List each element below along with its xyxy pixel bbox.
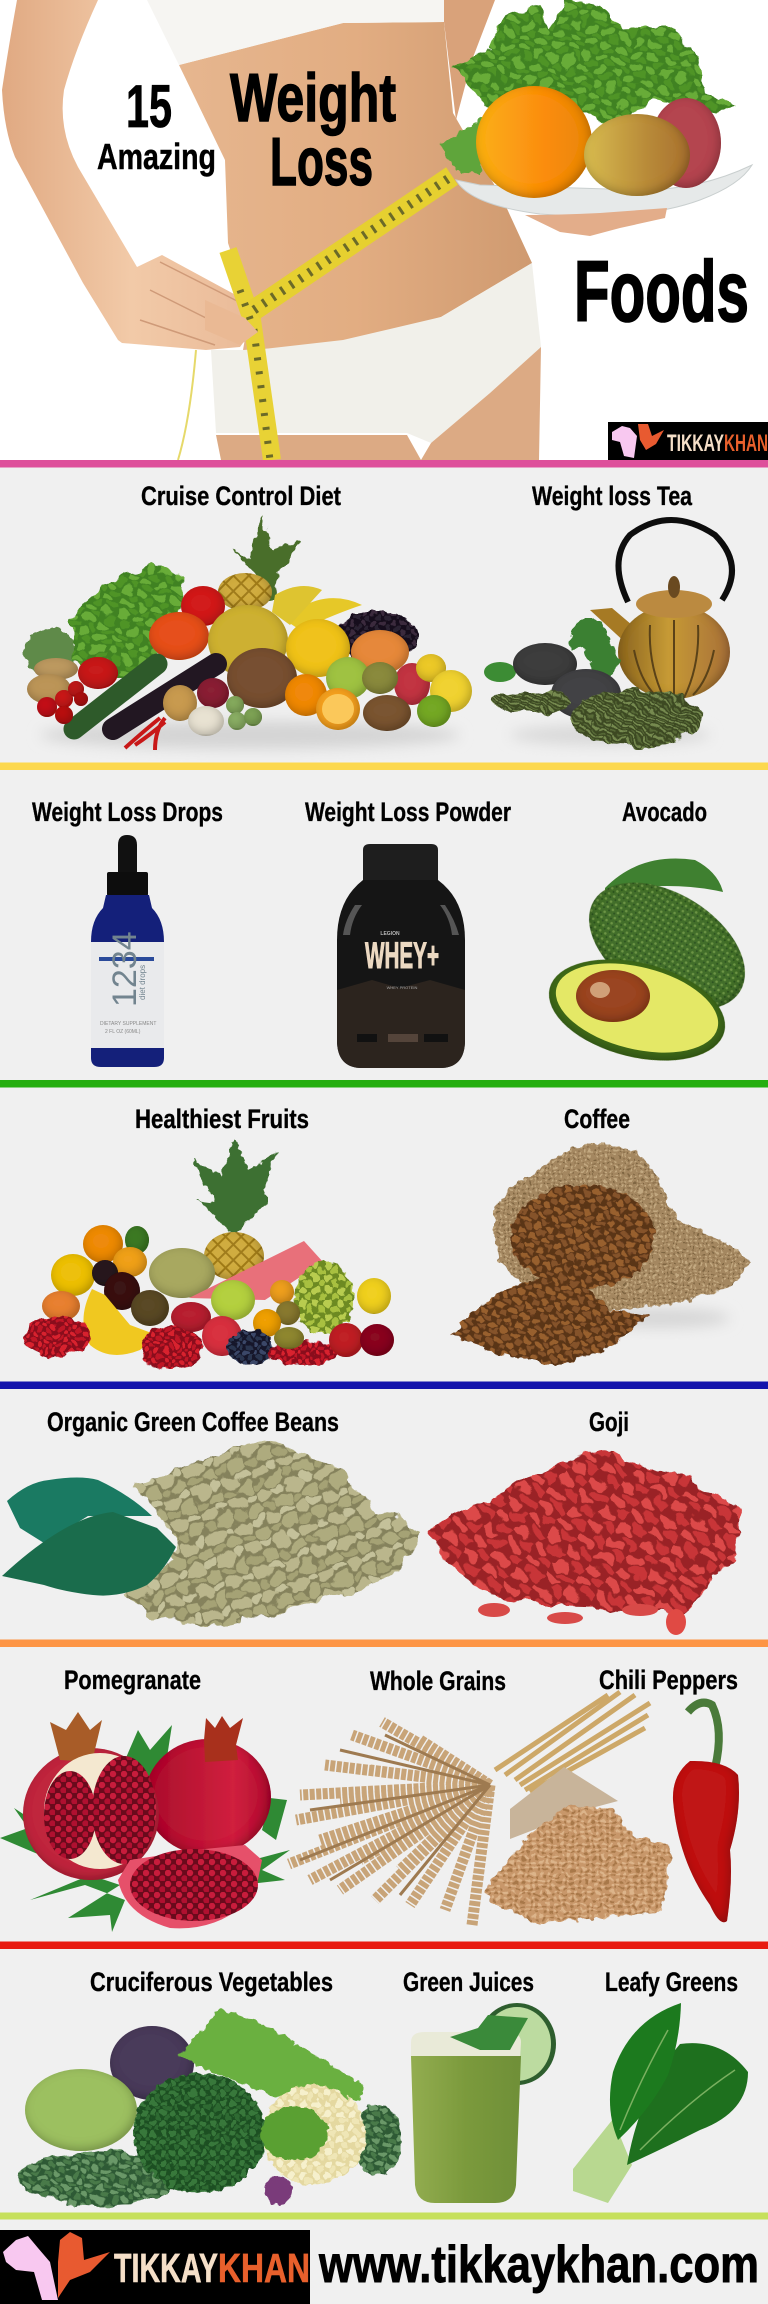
divider red [0, 1942, 768, 1949]
image: green coffee beans and leaves [2, 1442, 421, 1627]
divider green [0, 1080, 768, 1088]
measuring string [178, 350, 196, 460]
image: wheat and grain [289, 1692, 672, 1925]
heading: Cruciferous Vegetables: Cruciferous Vegetables [90, 1967, 333, 1997]
image: cruciferous vegetables [18, 2008, 402, 2204]
panel: row 3 [24, 1104, 750, 1370]
heading: Pomegranate: Pomegranate [64, 1665, 201, 1695]
white briefs [211, 263, 541, 443]
red apple [651, 98, 721, 188]
heading: Weight loss Tea: Weight loss Tea [532, 481, 693, 511]
title: Weight: Weight [230, 60, 396, 136]
image: whey protein tub: LEGION [380, 931, 400, 937]
image: diet drops bottle: diet drops [138, 965, 147, 1000]
heading: Avocado: Avocado [622, 797, 707, 827]
footer [0, 2230, 759, 2304]
image: teapot and cups [484, 520, 732, 746]
fingers [140, 262, 245, 345]
torso [179, 22, 532, 350]
panel: row 6 [18, 1967, 748, 2204]
image: coffee sack [452, 1144, 750, 1365]
side leaf [441, 117, 485, 173]
heading: Coffee: Coffee [564, 1104, 630, 1134]
small logo: TIKKAY [667, 430, 724, 457]
footer logo: TIKKAY [114, 2245, 218, 2291]
panel: row 4 [2, 1407, 740, 1635]
image: diet drops bottle: DIETARY SUPPLEMENT [100, 1021, 156, 1027]
heading: Weight Loss Drops: Weight Loss Drops [32, 797, 223, 827]
lettuce [453, 0, 735, 127]
woman's left arm and hand [2, 0, 260, 350]
panel: row 2 [32, 797, 767, 1077]
hero panel [0, 0, 768, 460]
woman's right arm [444, 0, 495, 120]
measuring tape [228, 176, 452, 460]
panel: row 1 [24, 481, 732, 750]
small logo [608, 422, 768, 460]
white nails and hand over tape [205, 300, 258, 345]
title: Amazing: Amazing [97, 136, 216, 177]
heading: Cruise Control Diet: Cruise Control Diet [141, 481, 341, 511]
divider lime [0, 2212, 768, 2220]
divider orange [0, 1640, 768, 1647]
divider yellow [0, 762, 768, 770]
divider blue [0, 1382, 768, 1389]
image: green juice glass [411, 2003, 556, 2203]
white top [147, 0, 444, 65]
image: avocado [538, 856, 767, 1077]
image: chili pepper [673, 1703, 739, 1922]
mango [584, 114, 690, 196]
heading: Organic Green Coffee Beans: Organic Green Coffee Beans [47, 1407, 339, 1437]
divider pink [0, 460, 768, 468]
title: 15: 15 [126, 73, 172, 140]
heading: Goji: Goji [589, 1407, 629, 1437]
image: diet drops bottle: 2 FL OZ (60ML) [105, 1029, 141, 1035]
image: fruit and vegetable pile [24, 515, 472, 750]
image: whey protein tub [337, 844, 465, 1068]
panel: row 5 [0, 1665, 739, 1932]
heading: Chili Peppers: Chili Peppers [599, 1665, 738, 1695]
thighs [216, 347, 541, 460]
image: diet drops bottle [91, 835, 164, 1067]
footer logo [0, 2230, 310, 2304]
image: diet drops bottle: 1234 [106, 931, 144, 1007]
hand under plate [525, 208, 667, 236]
heading: Whole Grains: Whole Grains [370, 1666, 506, 1696]
plate [456, 165, 752, 216]
title: Loss: Loss [270, 124, 373, 200]
image: whey protein tub: WHEY+ [365, 935, 439, 976]
footer logo: KHAN [218, 2245, 310, 2291]
image: whey protein tub: WHEY PROTEIN [387, 985, 418, 990]
heading: Green Juices: Green Juices [403, 1967, 534, 1997]
image: fruit basket pile [24, 1137, 394, 1370]
heading: Weight Loss Powder: Weight Loss Powder [305, 797, 511, 827]
image: leafy greens [573, 2003, 748, 2203]
heading: Healthiest Fruits: Healthiest Fruits [135, 1104, 309, 1134]
image: pomegranates [0, 1712, 290, 1932]
image: goji berries [430, 1453, 740, 1635]
orange fruit [476, 86, 592, 198]
